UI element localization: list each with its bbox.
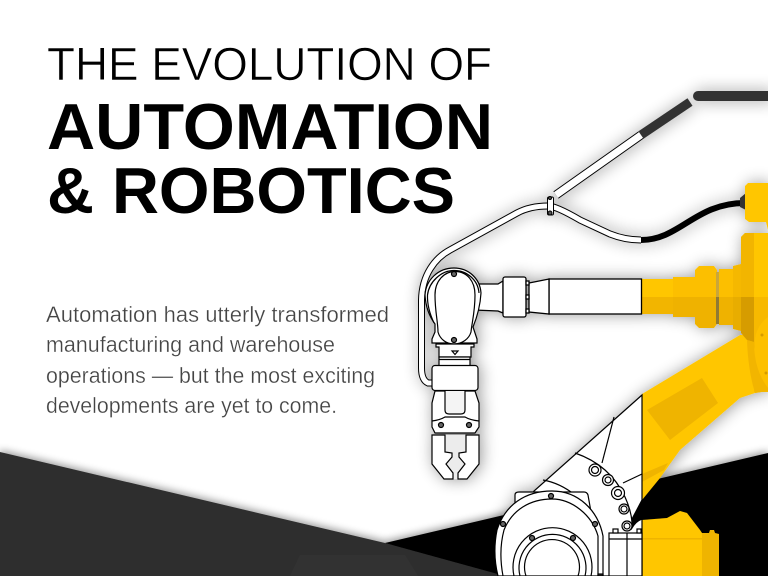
yellow lower arm	[642, 335, 768, 500]
gripper	[432, 366, 479, 479]
intro paragraph: developments are yet to come.	[46, 393, 337, 418]
yellow main body	[741, 183, 768, 393]
white lower arm outline	[500, 395, 642, 576]
intro paragraph: manufacturing and warehouse	[46, 332, 335, 357]
title: THE EVOLUTION OF	[47, 38, 492, 90]
yellow forearm	[642, 264, 741, 331]
dark floor wedge	[0, 452, 505, 576]
title: AUTOMATION	[47, 90, 493, 163]
cables	[422, 96, 768, 383]
bolt holes	[589, 464, 632, 531]
rotary joint	[495, 491, 603, 576]
intro paragraph: operations — but the most exciting	[46, 363, 375, 388]
intro paragraph	[46, 302, 389, 418]
wrist joint	[425, 268, 481, 366]
title	[47, 38, 493, 227]
robot arm illustration	[422, 96, 768, 576]
cable connector	[740, 193, 746, 210]
intro paragraph: Automation has utterly transformed	[46, 302, 389, 327]
black floor wedge	[385, 453, 768, 576]
title: & ROBOTICS	[47, 154, 455, 227]
white forearm	[474, 277, 642, 317]
yellow base	[642, 511, 719, 576]
cable clamp	[548, 196, 554, 215]
white base block	[609, 529, 642, 576]
